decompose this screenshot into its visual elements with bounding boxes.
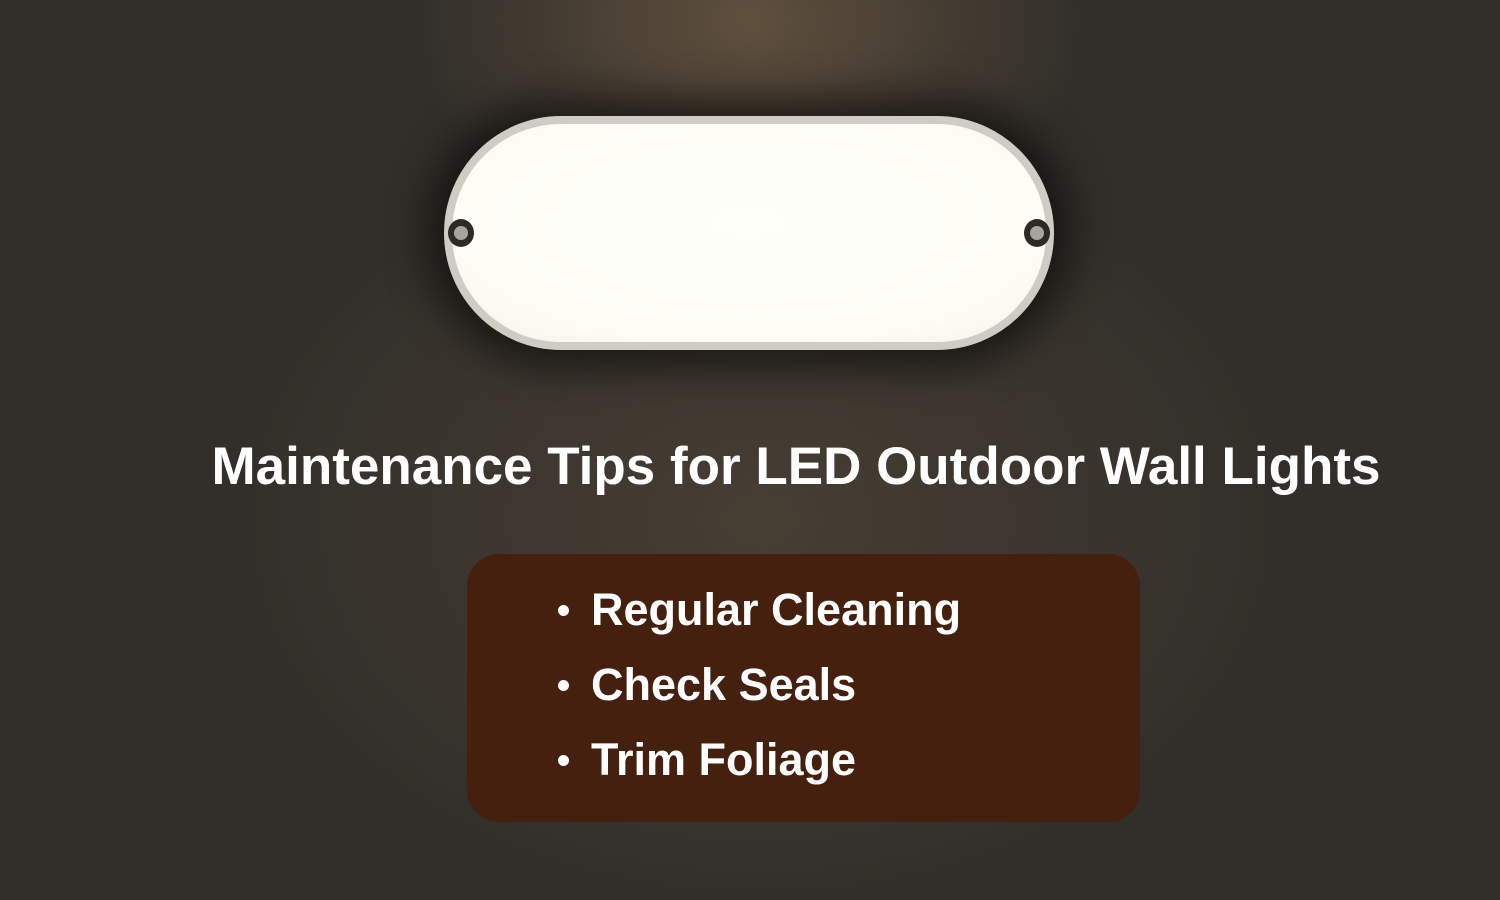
screw left	[448, 219, 474, 247]
tip: check seals: Check Seals	[591, 659, 856, 710]
screw right	[1024, 219, 1050, 247]
icon: LED wall light	[444, 116, 1054, 350]
title: Maintenance Tips for LED Outdoor Wall Lights	[212, 437, 1380, 496]
tip: trim foliage: Trim Foliage	[591, 734, 856, 785]
lens	[452, 124, 1046, 342]
tip: regular cleaning: Regular Cleaning	[591, 584, 961, 635]
panel: tips list	[467, 554, 1140, 822]
